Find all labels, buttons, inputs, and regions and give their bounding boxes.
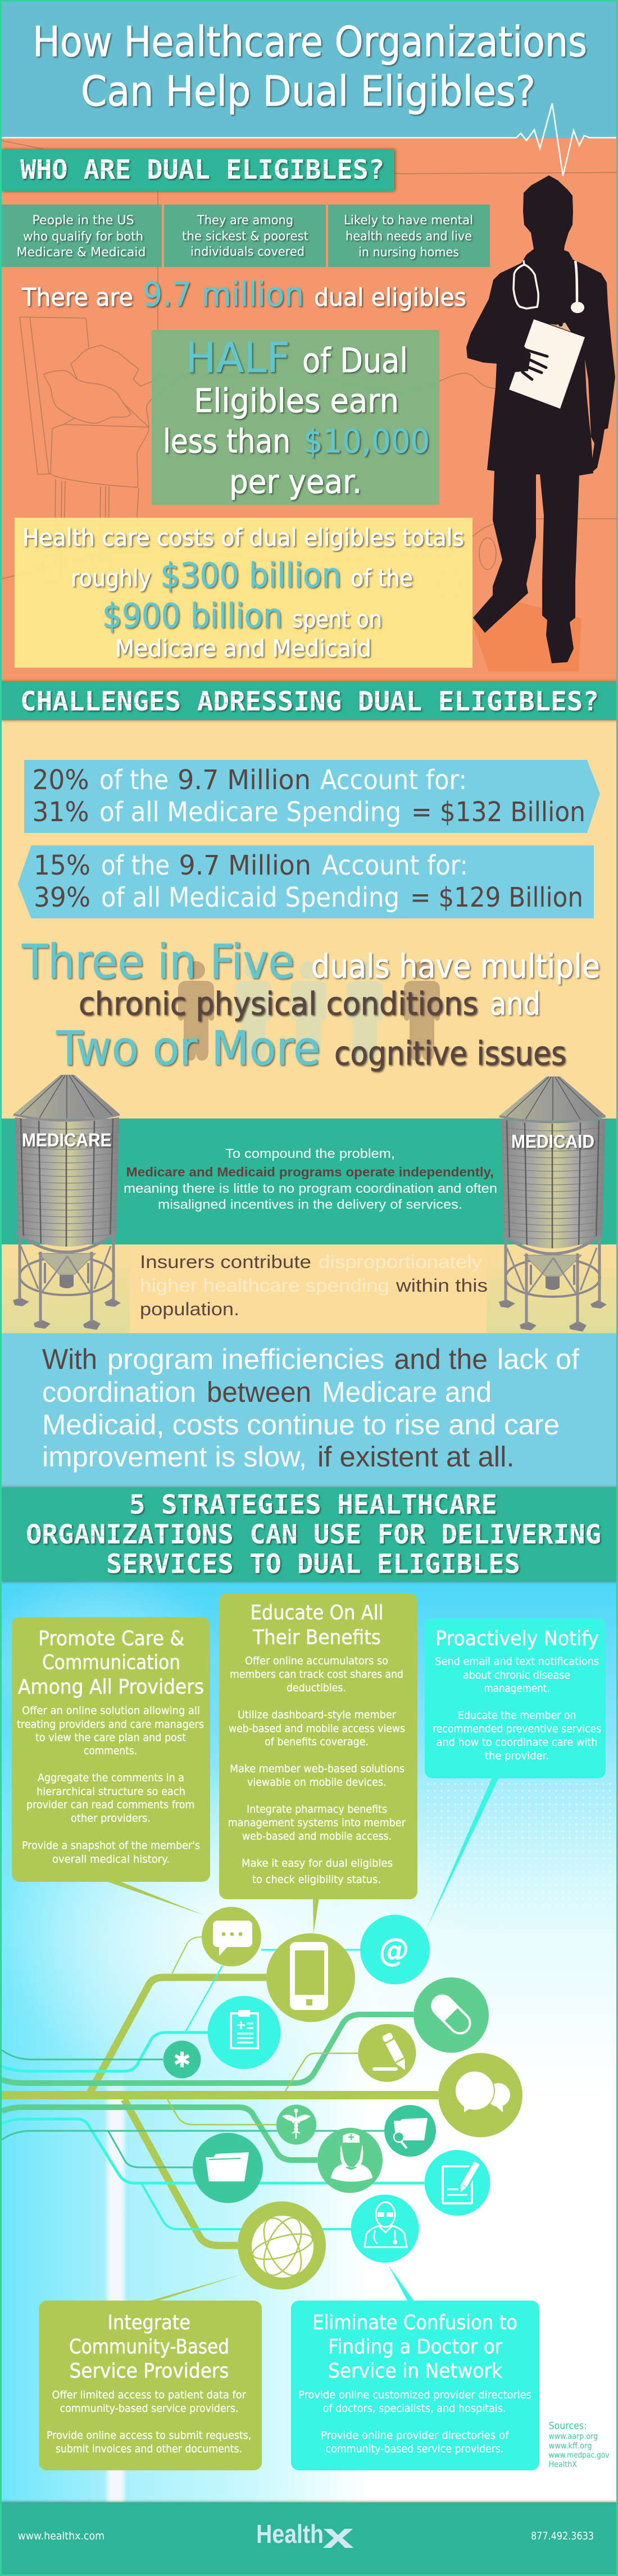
label: medicare: MEDICARE bbox=[22, 1130, 111, 1150]
callout: half earn less than 10000: per year. bbox=[229, 463, 362, 501]
bubble: promote care: to view the care plan and post bbox=[35, 1731, 186, 1744]
icon: globe bbox=[238, 2201, 326, 2290]
icon: pencil bbox=[358, 2024, 416, 2082]
callout: health care costs: spent on bbox=[292, 605, 382, 633]
text: sources: www.medpac.gov bbox=[548, 2451, 609, 2460]
bubble: promote care: Among All Providers bbox=[18, 1676, 204, 1699]
text: insurers contribute bbox=[140, 1252, 488, 1319]
text: insurers contribute: population. bbox=[140, 1299, 239, 1319]
box: sickest and poorest: They are among bbox=[197, 214, 293, 228]
bubble: integrate community-based providers: Integrate bbox=[108, 2311, 190, 2334]
icon: five people bbox=[178, 961, 440, 1061]
bubble: integrate community-based providers: Community-Based bbox=[69, 2335, 229, 2358]
bubble: eliminate confusion: Finding a Doctor or bbox=[328, 2335, 502, 2358]
callout: half earn less than 10000: of Dual bbox=[302, 341, 408, 381]
text: sources bbox=[548, 2420, 609, 2469]
bubble: proactively notify: Send email and text notifications bbox=[435, 1655, 599, 1668]
text: website: www.healthx.com bbox=[18, 2530, 104, 2542]
arrow: medicaid spending: Account for: bbox=[322, 850, 468, 881]
box: who they are: who qualify for both bbox=[23, 230, 143, 244]
text: sources: Sources: bbox=[548, 2420, 587, 2432]
bubble: proactively notify: Proactively Notify bbox=[435, 1627, 599, 1650]
bubble: educate on benefits: Integrate pharmacy benefits bbox=[247, 1803, 387, 1816]
heading band: 5 strategies: 5 STRATEGIES HEALTHCARE bbox=[129, 1490, 497, 1520]
heading band: 5 strategies: ORGANIZATIONS CAN USE FOR DELIVERING bbox=[26, 1519, 601, 1550]
band: program inefficiencies: if existent at all. bbox=[317, 1441, 515, 1473]
text: insurers contribute: Insurers contribute bbox=[140, 1252, 311, 1272]
arrow: medicare spending: of all Medicare Spending bbox=[99, 796, 401, 828]
box: mental health needs: Likely to have mental bbox=[344, 214, 473, 228]
bubble: promote care: treating providers and care managers bbox=[17, 1718, 204, 1731]
arrow: medicaid spending: of all Medicaid Spending bbox=[101, 882, 399, 913]
heartbeat line bbox=[2, 103, 616, 176]
text: sources: www.aarp.org bbox=[548, 2432, 598, 2441]
panel: challenges bbox=[0, 682, 618, 1488]
bubble: proactively notify: Educate the member on bbox=[458, 1709, 576, 1722]
bubble: educate on benefits: Their Benefits bbox=[252, 1626, 381, 1649]
arrow: medicare spending: = $132 Billion bbox=[411, 796, 585, 828]
bubble: proactively notify: management. bbox=[484, 1682, 549, 1695]
bubble: promote care: overall medical history. bbox=[52, 1853, 170, 1866]
heading band: 5 strategies: SERVICES TO DUAL ELIGIBLES bbox=[106, 1549, 520, 1579]
band: program inefficiencies: Medicaid, costs continue to rise and care bbox=[42, 1409, 560, 1441]
band: compound the problem: Medicare and Medicaid programs operate independently, bbox=[126, 1165, 494, 1179]
callout: health care costs: of the bbox=[351, 564, 413, 592]
band: program inefficiencies: between bbox=[207, 1376, 311, 1408]
box: sickest and poorest: individuals covered bbox=[190, 245, 305, 259]
box: who they are: People in the US bbox=[33, 214, 134, 228]
bubble: integrate community-based providers bbox=[39, 2274, 262, 2470]
box: sickest and poorest: the sickest & poorest bbox=[182, 229, 308, 244]
bubble: promote care: Aggregate the comments in a bbox=[38, 1772, 184, 1784]
band: program inefficiencies: program inefficiencies bbox=[107, 1343, 384, 1375]
panel: page header bbox=[0, 0, 618, 138]
arrow: medicare spending: 9.7 Million bbox=[178, 764, 311, 796]
box: mental health needs bbox=[328, 205, 490, 267]
bubble: educate on benefits: members can track cost shares and bbox=[230, 1668, 403, 1681]
stat: 9.7 million dual eligibles bbox=[21, 275, 466, 314]
icon: folder bbox=[193, 2133, 263, 2203]
bubble: promote care bbox=[12, 1617, 210, 1916]
callout: health care costs: roughly bbox=[71, 564, 151, 592]
text: insurers contribute: within this bbox=[396, 1275, 488, 1296]
callout: health care costs: Health care costs of dual eligibles totals bbox=[22, 524, 464, 551]
bubble: eliminate confusion: Provide online provider directories of bbox=[321, 2429, 510, 2442]
bubble: educate on benefits: to check eligibility status. bbox=[252, 1873, 381, 1886]
stat: 9.7 million dual eligibles: dual eligibles bbox=[314, 283, 466, 312]
callout: half earn less than 10000: $10,000 bbox=[303, 422, 430, 460]
bubble: promote care: provider can read comments from bbox=[26, 1799, 194, 1811]
title: Can Help Dual Eligibles? bbox=[81, 67, 535, 116]
banner: who are dual eligibles bbox=[2, 150, 394, 191]
bubble: promote care: other providers. bbox=[71, 1812, 151, 1825]
text: sources: HealthX bbox=[548, 2460, 577, 2469]
arrow: medicare spending: 31% bbox=[33, 796, 89, 828]
bubble: promote care: Communication bbox=[42, 1651, 180, 1674]
bubble: educate on benefits: Utilize dashboard-style member bbox=[238, 1709, 396, 1721]
bubble: proactively notify: about chronic disease bbox=[463, 1669, 570, 1682]
icon: clipboard bbox=[208, 1996, 281, 2069]
bubble: eliminate confusion: Service in Network bbox=[328, 2360, 502, 2383]
stat: three in five: Three in Five bbox=[21, 934, 294, 989]
panel: footer bbox=[0, 2502, 618, 2576]
bubble: promote care: hierarchical structure so each bbox=[37, 1785, 185, 1798]
bubble: integrate community-based providers: Service Providers bbox=[70, 2360, 229, 2383]
icon: pill bbox=[413, 1977, 489, 2053]
callout: half earn less than 10000 bbox=[152, 330, 439, 505]
bubble: educate on benefits: Make member web-based solutions bbox=[230, 1763, 405, 1775]
bubble: proactively notify: recommended preventive services bbox=[433, 1723, 601, 1735]
callout: health care costs: Medicare and Medicaid bbox=[115, 635, 371, 662]
bubble: promote care: Provide a snapshot of the member's bbox=[22, 1839, 200, 1851]
bubble: educate on benefits: Make it easy for dual eligibles bbox=[242, 1857, 393, 1869]
text: sources: www.kff.org bbox=[548, 2442, 592, 2451]
band: program inefficiencies bbox=[0, 1333, 618, 1488]
arrow: medicare spending: Account for: bbox=[320, 764, 467, 796]
arrow: medicare spending: of the bbox=[99, 764, 169, 796]
arrow: medicare spending: 20% bbox=[33, 764, 89, 796]
arrow: medicaid spending: 15% bbox=[34, 850, 90, 881]
bubble: eliminate confusion bbox=[291, 2265, 539, 2470]
arrow: medicaid spending: 39% bbox=[34, 882, 90, 913]
callout: half earn less than 10000: HALF bbox=[185, 334, 290, 382]
bubble: educate on benefits: viewable on mobile devices. bbox=[247, 1776, 387, 1789]
bubble: educate on benefits: web-based and mobile access views bbox=[229, 1722, 405, 1735]
box: who they are bbox=[2, 205, 162, 267]
icon: asterisk bbox=[163, 2040, 201, 2079]
bubble: educate on benefits: Offer online accumulators so bbox=[245, 1655, 388, 1667]
text: insurers contribute: higher healthcare spending bbox=[140, 1275, 389, 1296]
bubble: proactively notify: the provider. bbox=[485, 1750, 549, 1762]
stat: 9.7 million dual eligibles: 9.7 million bbox=[143, 275, 304, 314]
bubble: proactively notify: and how to coordinate care with bbox=[436, 1736, 598, 1749]
bubble: educate on benefits bbox=[219, 1593, 417, 1934]
bubble: eliminate confusion: Eliminate Confusion to bbox=[312, 2311, 517, 2334]
text: insurers contribute: disproportionately bbox=[319, 1252, 482, 1272]
stat: three in five: chronic physical conditions bbox=[79, 986, 478, 1022]
icon: doctor with glasses bbox=[351, 2194, 419, 2263]
band: program inefficiencies: improvement is slow, bbox=[42, 1441, 307, 1473]
icon: caduceus bbox=[276, 2104, 316, 2145]
callout: half earn less than 10000: less than bbox=[163, 422, 290, 460]
bubble: proactively notify bbox=[425, 1618, 606, 1929]
bubble: integrate community-based providers: Provide online access to submit requests, bbox=[47, 2429, 252, 2442]
arrow: medicaid spending: = $129 Billion bbox=[410, 882, 583, 913]
icon: email at sign: @ bbox=[379, 1931, 410, 1969]
icon: chat bubble bbox=[202, 1907, 261, 1966]
icon: nurse bbox=[317, 2128, 383, 2193]
box: mental health needs: health needs and live bbox=[346, 229, 472, 244]
title bbox=[33, 18, 587, 116]
box: mental health needs: in nursing homes bbox=[358, 246, 459, 260]
band: program inefficiencies: and the bbox=[394, 1343, 488, 1375]
stat: three in five: cognitive issues bbox=[334, 1034, 566, 1072]
bubble: integrate community-based providers: Offer limited access to patient data for bbox=[52, 2389, 246, 2401]
bubble: eliminate confusion: Provide online customized provider directories bbox=[298, 2389, 531, 2401]
logo: healthx: x bbox=[322, 2515, 355, 2556]
icon: medicaid silo bbox=[499, 1076, 607, 1332]
network of connector lines bbox=[2, 1937, 438, 2245]
band: program inefficiencies: lack of bbox=[497, 1343, 580, 1375]
bubble: promote care: Promote Care & bbox=[38, 1627, 184, 1650]
arrow: medicaid spending: of the bbox=[101, 850, 170, 881]
bubble: educate on benefits: of benefits coverage. bbox=[265, 1736, 369, 1748]
icon: folder search bbox=[384, 2105, 436, 2157]
box: who they are: Medicare & Medicaid bbox=[17, 246, 146, 260]
icon: email at sign bbox=[360, 1914, 430, 1984]
bubble: educate on benefits: Educate On All bbox=[251, 1601, 383, 1624]
bubble: promote care: Offer an online solution allowing all bbox=[22, 1704, 200, 1717]
callout: health care costs bbox=[15, 518, 472, 668]
bubble: eliminate confusion: of doctors, specialists, and hospitals. bbox=[322, 2402, 506, 2415]
band: compound the problem: meaning there is little to no program coordination and often bbox=[124, 1181, 497, 1196]
bubble: integrate community-based providers: community-based service providers. bbox=[60, 2402, 238, 2415]
callout: health care costs: $300 billion bbox=[161, 556, 342, 595]
panel: five strategies bbox=[0, 1488, 618, 2503]
icon: note and pen bbox=[425, 2150, 490, 2216]
banner: who are dual eligibles: WHO ARE DUAL ELIGIBLES? bbox=[20, 155, 384, 185]
arrow: medicare spending bbox=[24, 760, 600, 833]
bubble: educate on benefits: deductibles. bbox=[287, 1682, 346, 1694]
callout: half earn less than 10000: Eligibles earn bbox=[194, 382, 399, 420]
band: program inefficiencies: Medicare and bbox=[322, 1376, 492, 1408]
icon: mobile phone bbox=[266, 1934, 355, 2022]
stat: three in five bbox=[21, 934, 600, 1076]
text: phone number: 877.492.3633 bbox=[531, 2530, 594, 2542]
band: program inefficiencies: coordination bbox=[42, 1376, 196, 1408]
callout: health care costs: $900 billion bbox=[102, 596, 283, 636]
icon: medicare silo bbox=[13, 1075, 121, 1330]
bubble: integrate community-based providers: submit invoices and other documents. bbox=[56, 2443, 242, 2455]
stat: three in five: and bbox=[490, 986, 540, 1022]
band: program inefficiencies: With bbox=[42, 1343, 97, 1375]
band: compound the problem: To compound the problem, bbox=[225, 1146, 395, 1161]
bubble: educate on benefits: web-based and mobile access. bbox=[242, 1830, 392, 1842]
logo: healthx bbox=[256, 2515, 355, 2556]
bubble: educate on benefits: management systems into member bbox=[228, 1817, 406, 1829]
logo: healthx: Health bbox=[256, 2519, 324, 2548]
icon: conversation bubbles bbox=[438, 2053, 522, 2137]
arrow: medicaid spending: 9.7 Million bbox=[179, 850, 311, 881]
illustration: patient in wheelchair line art bbox=[1, 141, 618, 599]
box: sickest and poorest bbox=[164, 205, 326, 267]
stat: 9.7 million dual eligibles: There are bbox=[21, 283, 133, 312]
stat: three in five: Two or More bbox=[56, 1021, 320, 1076]
band: compound the problem bbox=[0, 1119, 618, 1333]
heading band: challenges: CHALLENGES ADRESSING DUAL ELIGIBLES? bbox=[20, 686, 599, 717]
bubble: promote care: comments. bbox=[84, 1745, 137, 1757]
bubble: eliminate confusion: community-based service providers. bbox=[326, 2443, 503, 2455]
arrow: medicaid spending bbox=[18, 845, 594, 918]
panel: who are dual eligibles bbox=[0, 103, 618, 682]
heading band: 5 strategies bbox=[0, 1488, 618, 1581]
label: medicaid: MEDICAID bbox=[511, 1131, 594, 1152]
band: compound the problem: misaligned incentives in the delivery of services. bbox=[158, 1197, 462, 1212]
illustration: doctor silhouette bbox=[466, 175, 615, 672]
